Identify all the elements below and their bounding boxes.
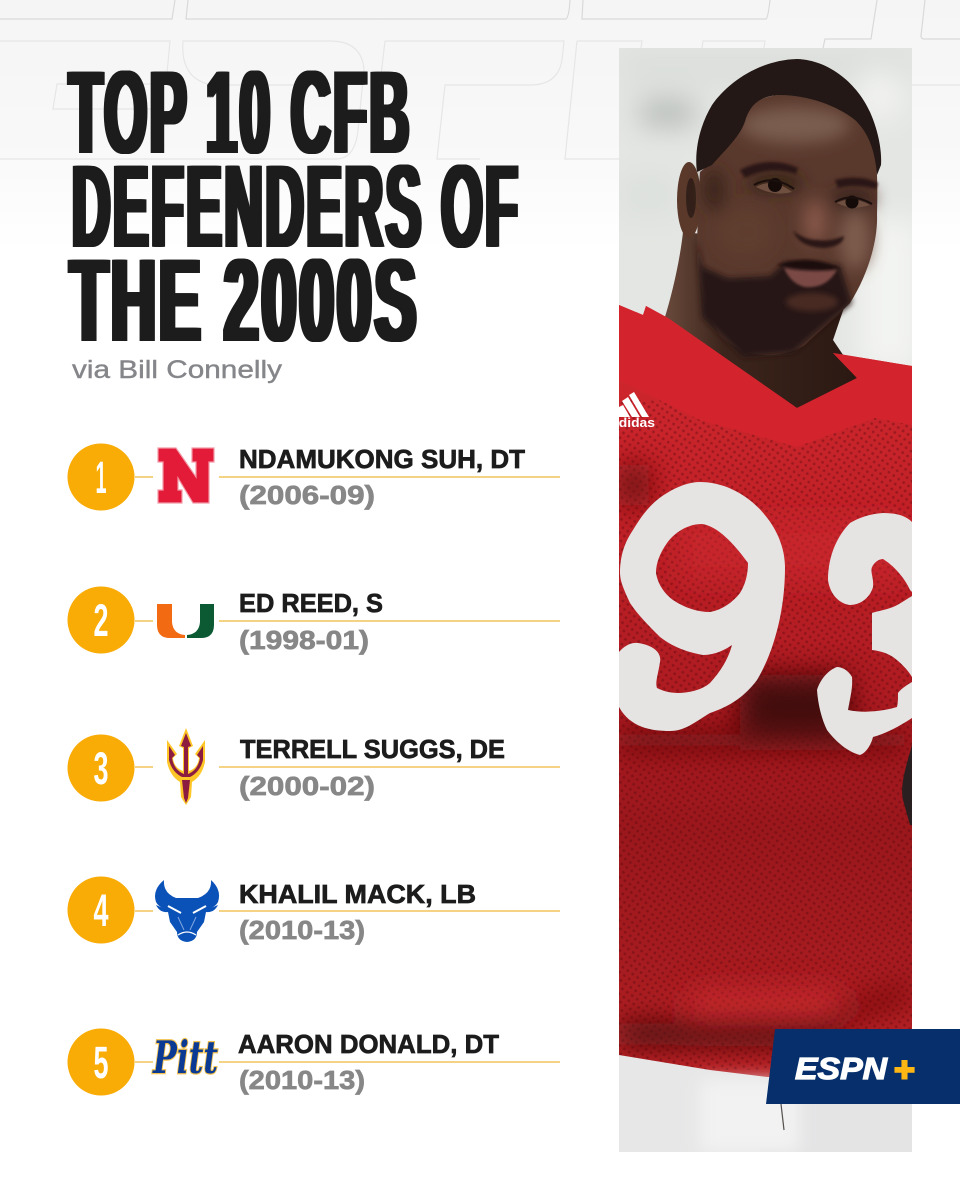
connector line 5 — [135, 1061, 560, 1063]
connector line 4 — [135, 910, 560, 912]
years 2: (1998-01) — [239, 625, 369, 655]
player name 3: TERRELL SUGGS, DE — [240, 736, 505, 764]
connector line 3 — [135, 766, 560, 768]
beard — [697, 240, 852, 357]
rank badge 1: 1 — [96, 452, 106, 503]
title: DEFENDERS OF — [72, 141, 520, 273]
rank badge 1 — [68, 444, 134, 510]
nose — [793, 231, 844, 248]
row 1: Ndamukong Suh — [68, 444, 560, 510]
adidas logo — [619, 392, 654, 427]
title — [66, 47, 520, 367]
rank badge 2: 2 — [94, 595, 108, 646]
rank badge 4: 4 — [94, 885, 108, 936]
years 1: (2006-09) — [239, 480, 375, 510]
rank badge 5: 5 — [94, 1037, 108, 1088]
rank badge 3: 3 — [94, 743, 108, 794]
player name 4: KHALIL MACK, LB — [239, 881, 476, 909]
shadow at arm gap — [902, 745, 912, 825]
rank badge 2 — [68, 586, 134, 654]
player name 5: AARON DONALD, DT — [238, 1031, 499, 1059]
subtitle: via Bill Connelly: via Bill Connelly — [72, 356, 283, 384]
player name 1: NDAMUKONG SUH, DT — [239, 446, 525, 474]
plus sign: + — [894, 1051, 915, 1089]
lips — [777, 260, 840, 287]
ESPN wordmark: ESPN — [795, 1051, 888, 1086]
player name 2: ED REED, S — [239, 590, 383, 618]
row 5: Aaron Donald — [68, 1028, 560, 1096]
years 5: (2010-13) — [239, 1065, 365, 1095]
years 4: (2010-13) — [239, 915, 365, 945]
connector line 1 — [135, 476, 560, 478]
ESPN+ banner — [766, 1029, 960, 1104]
neck — [664, 232, 860, 412]
icon: Pitt script logo: Pitt — [152, 1031, 218, 1084]
pants — [619, 1055, 912, 1152]
rank badge 4 — [68, 876, 134, 944]
connector line 2 — [135, 620, 560, 622]
icon: Arizona State pitchfork logo — [167, 728, 205, 805]
rank badge 3 — [68, 734, 134, 802]
years 3: (2000-02) — [239, 771, 375, 801]
title: TOP 10 CFB — [69, 47, 412, 179]
ear — [677, 162, 700, 234]
title: THE 2000S — [70, 235, 419, 367]
panel: player photo — [611, 48, 920, 1152]
jersey — [619, 305, 912, 1152]
hair — [696, 59, 881, 175]
eyes and brows — [740, 162, 878, 208]
row 2: Ed Reed — [68, 586, 560, 655]
adidas logo: adidas — [611, 415, 655, 430]
jersey number 93 — [619, 482, 912, 755]
row 3: Terrell Suggs — [68, 728, 560, 805]
chin highlight — [786, 293, 838, 311]
row 4: Khalil Mack — [68, 876, 560, 945]
icon: Buffalo bull logo — [155, 880, 219, 942]
icon: Miami U logo — [157, 604, 214, 638]
rank badge 5 — [68, 1028, 134, 1096]
face — [697, 95, 877, 355]
icon: Nebraska N logo — [158, 448, 214, 503]
